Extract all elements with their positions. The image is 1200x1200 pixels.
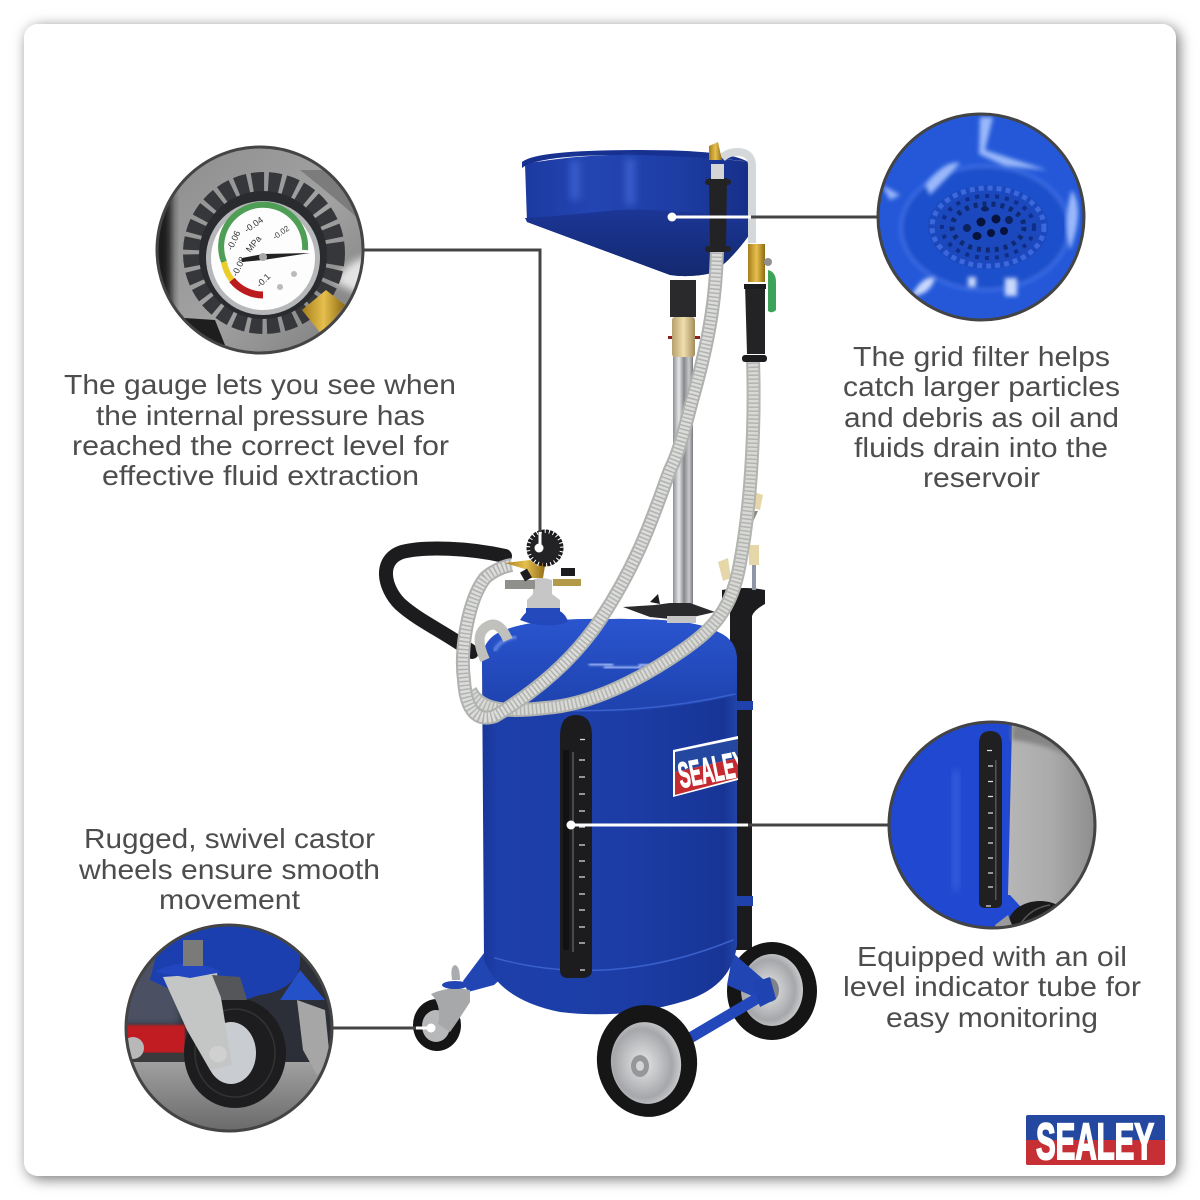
funnel pan: [522, 150, 750, 276]
callout line: grid filter: [668, 212, 880, 222]
right wheel arm and axle: [690, 953, 776, 1038]
tyre: [1009, 901, 1056, 924]
indicator strip: [979, 731, 1002, 908]
tank body: [482, 619, 737, 1014]
top fittings: [505, 560, 581, 619]
text: castor wheels: wheels ensure smooth: [78, 854, 380, 885]
castor photo wheel: [184, 998, 286, 1108]
black carry handle: [386, 549, 505, 652]
funnel outlet fitting: [668, 280, 700, 357]
funnel handle: [705, 142, 731, 252]
gauge bezel: [206, 201, 320, 315]
callout line: gauge: [362, 250, 544, 552]
small gauge: [529, 532, 561, 564]
nozzles: [718, 492, 763, 590]
tank highlights: [484, 637, 735, 1000]
text: grid filter: fluids drain into the: [854, 432, 1108, 463]
panel: castor close-up: [120, 920, 340, 1140]
panel: level indicator close-up: [888, 720, 1096, 930]
panel: grid filter close-up: [876, 112, 1086, 322]
castor wheel: [413, 965, 470, 1051]
callout line: castor: [331, 1024, 436, 1032]
text: level indicator: Equipped with an oil: [857, 941, 1127, 972]
product: oil drainer: SEALEY: [675, 743, 749, 796]
text: gauge: reached the correct level for: [72, 430, 449, 461]
callout line: level indicator: [566, 820, 890, 830]
tank dome: [482, 619, 737, 712]
tank badge: [673, 736, 738, 797]
filter mesh: [928, 185, 1048, 269]
gauge fitting: [302, 290, 345, 335]
text: gauge: [64, 369, 456, 491]
panel: gauge close-up: [150, 140, 370, 360]
gauge dial: -0.02: [271, 223, 292, 242]
clear tube: [722, 152, 752, 243]
swivel bracket: [155, 940, 247, 1070]
text: level indicator: [843, 941, 1141, 1033]
text: gauge: the internal pressure has: [96, 400, 425, 431]
grey loop hose: [480, 625, 508, 660]
text: level indicator: level indicator tube for: [843, 971, 1141, 1002]
text: grid filter: catch larger particles: [843, 371, 1120, 402]
product: oil drainer: [386, 142, 817, 1123]
text: grid filter: [843, 341, 1120, 493]
text: grid filter: and debris as oil and: [844, 402, 1119, 433]
castor frame arm: [463, 953, 505, 992]
text: gauge: effective fluid extraction: [102, 460, 419, 491]
text: castor wheels: movement: [159, 884, 300, 915]
front wheel: [590, 999, 704, 1123]
text: grid filter: reservoir: [923, 462, 1040, 493]
gauge dial: MPa: [244, 234, 263, 254]
gauge dial: -0.1: [254, 271, 272, 289]
hose 2: [470, 360, 754, 710]
text: gauge: The gauge lets you see when: [64, 369, 456, 400]
hose 1: [463, 250, 717, 718]
text: castor wheels: Rugged, swivel castor: [84, 823, 375, 854]
valve and handle: [742, 244, 776, 362]
text: castor wheels: [78, 823, 380, 915]
gauge dial: -0.06: [225, 229, 242, 252]
gauge dial: [211, 205, 315, 310]
top neck: [520, 610, 568, 626]
text: grid filter: The grid filter helps: [853, 341, 1110, 372]
gauge dial: -0.04: [242, 215, 265, 235]
rear wheel: [727, 942, 817, 1040]
oil level indicator tube: [560, 715, 592, 978]
text: level indicator: easy monitoring: [886, 1002, 1098, 1033]
rear support tube: [722, 588, 765, 950]
pole: [673, 355, 693, 610]
gauge dial: -0.08: [230, 255, 247, 278]
rubber ribbed guard: [198, 187, 330, 319]
pole base clamp: [623, 594, 715, 623]
